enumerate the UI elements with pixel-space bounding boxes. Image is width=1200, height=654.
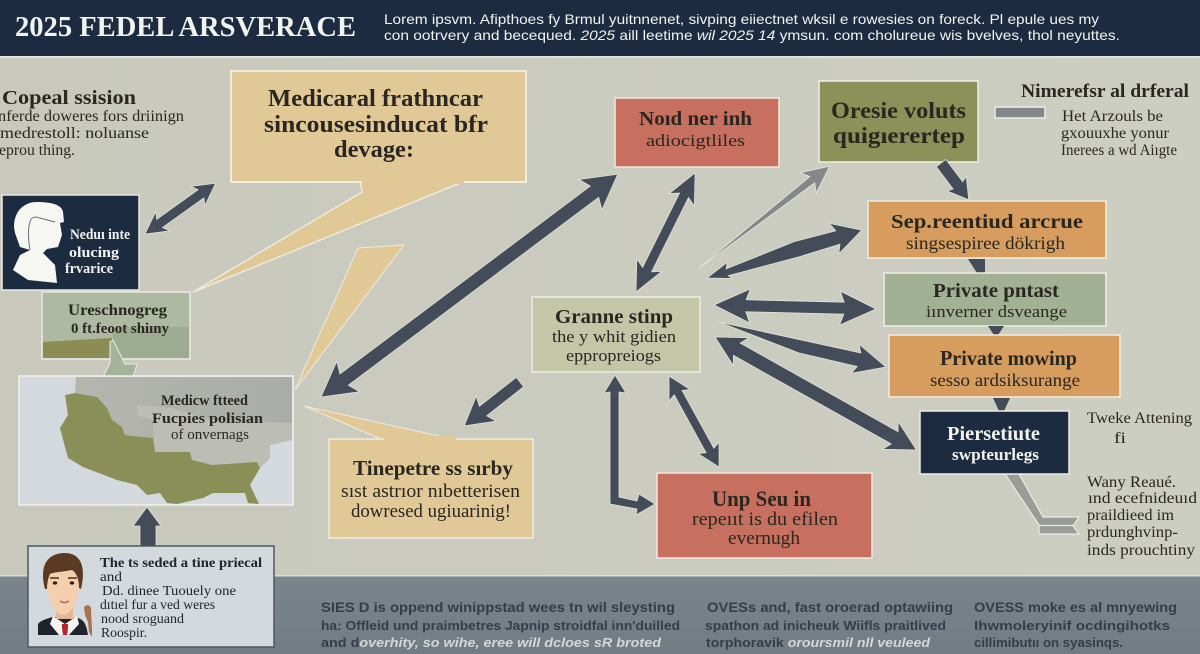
callout spike [295, 245, 404, 390]
left intro text: eprou thing. [0, 142, 75, 159]
panel: olive box [819, 81, 978, 162]
footer column 3: OVESS moke es al mnyewing [974, 599, 1177, 615]
header intro text: Lorem ipsvm. Afipthoes fy Brmul yuitnnenet, sivping eiiectnet wksil e rowesies on foreck. Pl epule ues my [384, 11, 1099, 27]
panel: red box lower: evernugh [728, 529, 800, 549]
header band [0, 0, 1200, 58]
right note bottom: ınd ecefnideuıd [1088, 490, 1197, 507]
arrow: long diagonal [310, 159, 629, 412]
panel: profile card: frvarice [65, 261, 114, 277]
map region: olive states [60, 393, 260, 504]
legend: Het Arzouls be [1062, 108, 1163, 125]
panel: red box lower: Unp Seu in [712, 486, 811, 511]
panel: profile card: Neduı inte [70, 227, 131, 243]
right note top: Tweke Attening [1087, 410, 1192, 427]
right note top [1087, 410, 1192, 447]
panel: red box top [615, 98, 779, 167]
panel: navy box: Piersetiute [947, 424, 1040, 445]
panel: red box top: Noıd ner inh [639, 108, 752, 130]
left intro text: Copeal ssision [2, 87, 136, 109]
panel: lower tan callout: Tinepetre ss sırby [353, 456, 513, 480]
title: 2025 FEDEL ARSVERACE [15, 12, 356, 43]
panel: grange box: the y whit gidien [552, 327, 677, 346]
panel: lower tan callout: dowresed ugiuarinig! [351, 502, 511, 522]
panel: person card [28, 546, 274, 647]
panel: orange box top: singsespiree dökrigh [906, 233, 1065, 253]
left intro text [0, 87, 184, 159]
legend [995, 81, 1189, 159]
footer column 3: cillimibutıı on syasinqs. [974, 635, 1123, 650]
right note bottom: inds prouchtiny [1087, 542, 1195, 559]
panel: person card: nood sroguand [101, 611, 184, 626]
panel: red box lower [657, 473, 872, 558]
arrow: person to map [133, 507, 161, 546]
arrow: profile to medical callout [138, 173, 223, 244]
legend: Inerees a wd Aiıgte [1061, 142, 1177, 159]
icon: man portrait [38, 553, 92, 637]
arrow: tapered to lower orange box [715, 308, 890, 382]
footer column 2 [705, 599, 953, 650]
arrow: grange to navy box [707, 323, 924, 464]
panel: medical callout: devage: [334, 137, 414, 163]
footer column 1: SIES D is oppend winippstad wees tn wil sleysting [321, 599, 675, 615]
panel: olive box: quigıerertep [833, 123, 965, 148]
arrow: grange to red box [623, 167, 708, 298]
footer column 2: spathon ad inicheuk Wiifls praitlived [705, 618, 946, 633]
panel: green box: Private pntast [933, 280, 1059, 302]
panel: green box: iınverner dsveange [926, 302, 1067, 321]
gray bent arrow [1005, 474, 1079, 534]
right note bottom: Wany Reaué. [1087, 474, 1176, 491]
panel: red box lower: repeııt is du efilen [692, 510, 838, 530]
panel: person card: Dd. dinee Tuouely one [102, 584, 236, 599]
panel: orange box top: Sep.reentiud arcrue [891, 211, 1083, 233]
panel: profile card: olucing [69, 245, 120, 261]
panel: lower tan callout [304, 406, 533, 538]
panel: person card: The ts seded a tine priecal [100, 556, 262, 571]
icon: head silhouette [13, 202, 64, 283]
footer column 1: ha: Offleid und praimbetres Japnip stroidfal inn'duilled [321, 618, 680, 633]
arrow: grange to lower callout [454, 369, 530, 438]
panel: map: of onvernags [171, 427, 249, 443]
footer column 2: torphoravik oroursmil nll veuleed [706, 635, 931, 650]
panel: map [19, 376, 293, 505]
panel: navy box [920, 411, 1069, 474]
panel: profile card [2, 195, 139, 290]
panel: orange box lower: sesso ardsiksurange [930, 370, 1080, 390]
footer column 3 [974, 599, 1177, 650]
arrow: grange to green box [714, 288, 876, 326]
legend: gxouuxhe yonur [1061, 125, 1170, 142]
right note bottom [1087, 474, 1197, 559]
legend: Nimerefsr al drferal [1021, 81, 1189, 102]
right note bottom: praildieed im [1087, 507, 1175, 524]
right note bottom: prdunghvinp- [1087, 524, 1178, 541]
connector: green to orange [988, 326, 1004, 335]
connector: orange to navy [993, 398, 1010, 411]
arrow: grange to lower red box [658, 370, 730, 473]
arrow: gray to olive box [690, 156, 838, 279]
panel: grange box: Granne stinp [555, 306, 673, 328]
left intro text: medrestoll: noluanse [0, 125, 149, 142]
panel: green note: Ureschnogreg [68, 302, 167, 319]
panel: orange box lower [889, 335, 1120, 397]
header intro text [384, 11, 1120, 43]
panel: medical callout: sincousesinducat bfr [264, 112, 488, 138]
panel: person card: Roospir. [101, 625, 147, 640]
panel: grange box: eppropreiogs [566, 346, 661, 365]
footer column 1 [321, 599, 680, 650]
panel: orange box top [868, 201, 1106, 258]
footer column 3: Ihwmoleryinif ocdingihotks [974, 618, 1170, 633]
panel: map: Fucpies polisian [152, 411, 264, 427]
panel: person card: dıtıel fur a ved weres [100, 597, 215, 612]
arrow: olive to orange [931, 156, 978, 207]
panel: medical callout [193, 71, 526, 292]
header intro text: con ootrvery and becequed. 2025 aill leetime wil 2025 14 ymsun. com cholureue wis bvelves, thol neyuttes. [384, 27, 1120, 43]
panel: green note [42, 292, 190, 377]
panel: medical callout: Medicaral frathncar [268, 86, 483, 112]
map region: gray states [75, 377, 292, 468]
arrow: bent grange to lower red box [604, 375, 655, 515]
panel: navy box: swpteurlegs [952, 445, 1040, 464]
footer column 2: OVESs and, fast oroerad optawiing [707, 599, 953, 615]
arrow: tapered to orange box [702, 215, 866, 293]
panel: red box top: adiocigtliles [646, 131, 745, 150]
panel: olive box: Oresie voluts [831, 98, 966, 123]
left intro text: nferde doweres fors driinign [0, 108, 184, 125]
panel: green note: 0 ft.feoot shiıny [71, 321, 169, 337]
panel: grange box [532, 297, 700, 372]
panel: green box [884, 273, 1106, 326]
panel: person card: and [100, 569, 122, 584]
panel: orange box lower: Private mowinp [940, 346, 1077, 370]
footer band [0, 575, 1200, 654]
right note top: fi [1114, 430, 1127, 447]
panel: lower tan callout: sıst astrıor nıbetterisen [341, 482, 520, 502]
footer column 1: and d overhity, so wihe, eree will dcloes sR broted [321, 635, 662, 650]
panel: map: Medicw ftteed [161, 393, 249, 409]
connector: orange to green [968, 259, 985, 273]
